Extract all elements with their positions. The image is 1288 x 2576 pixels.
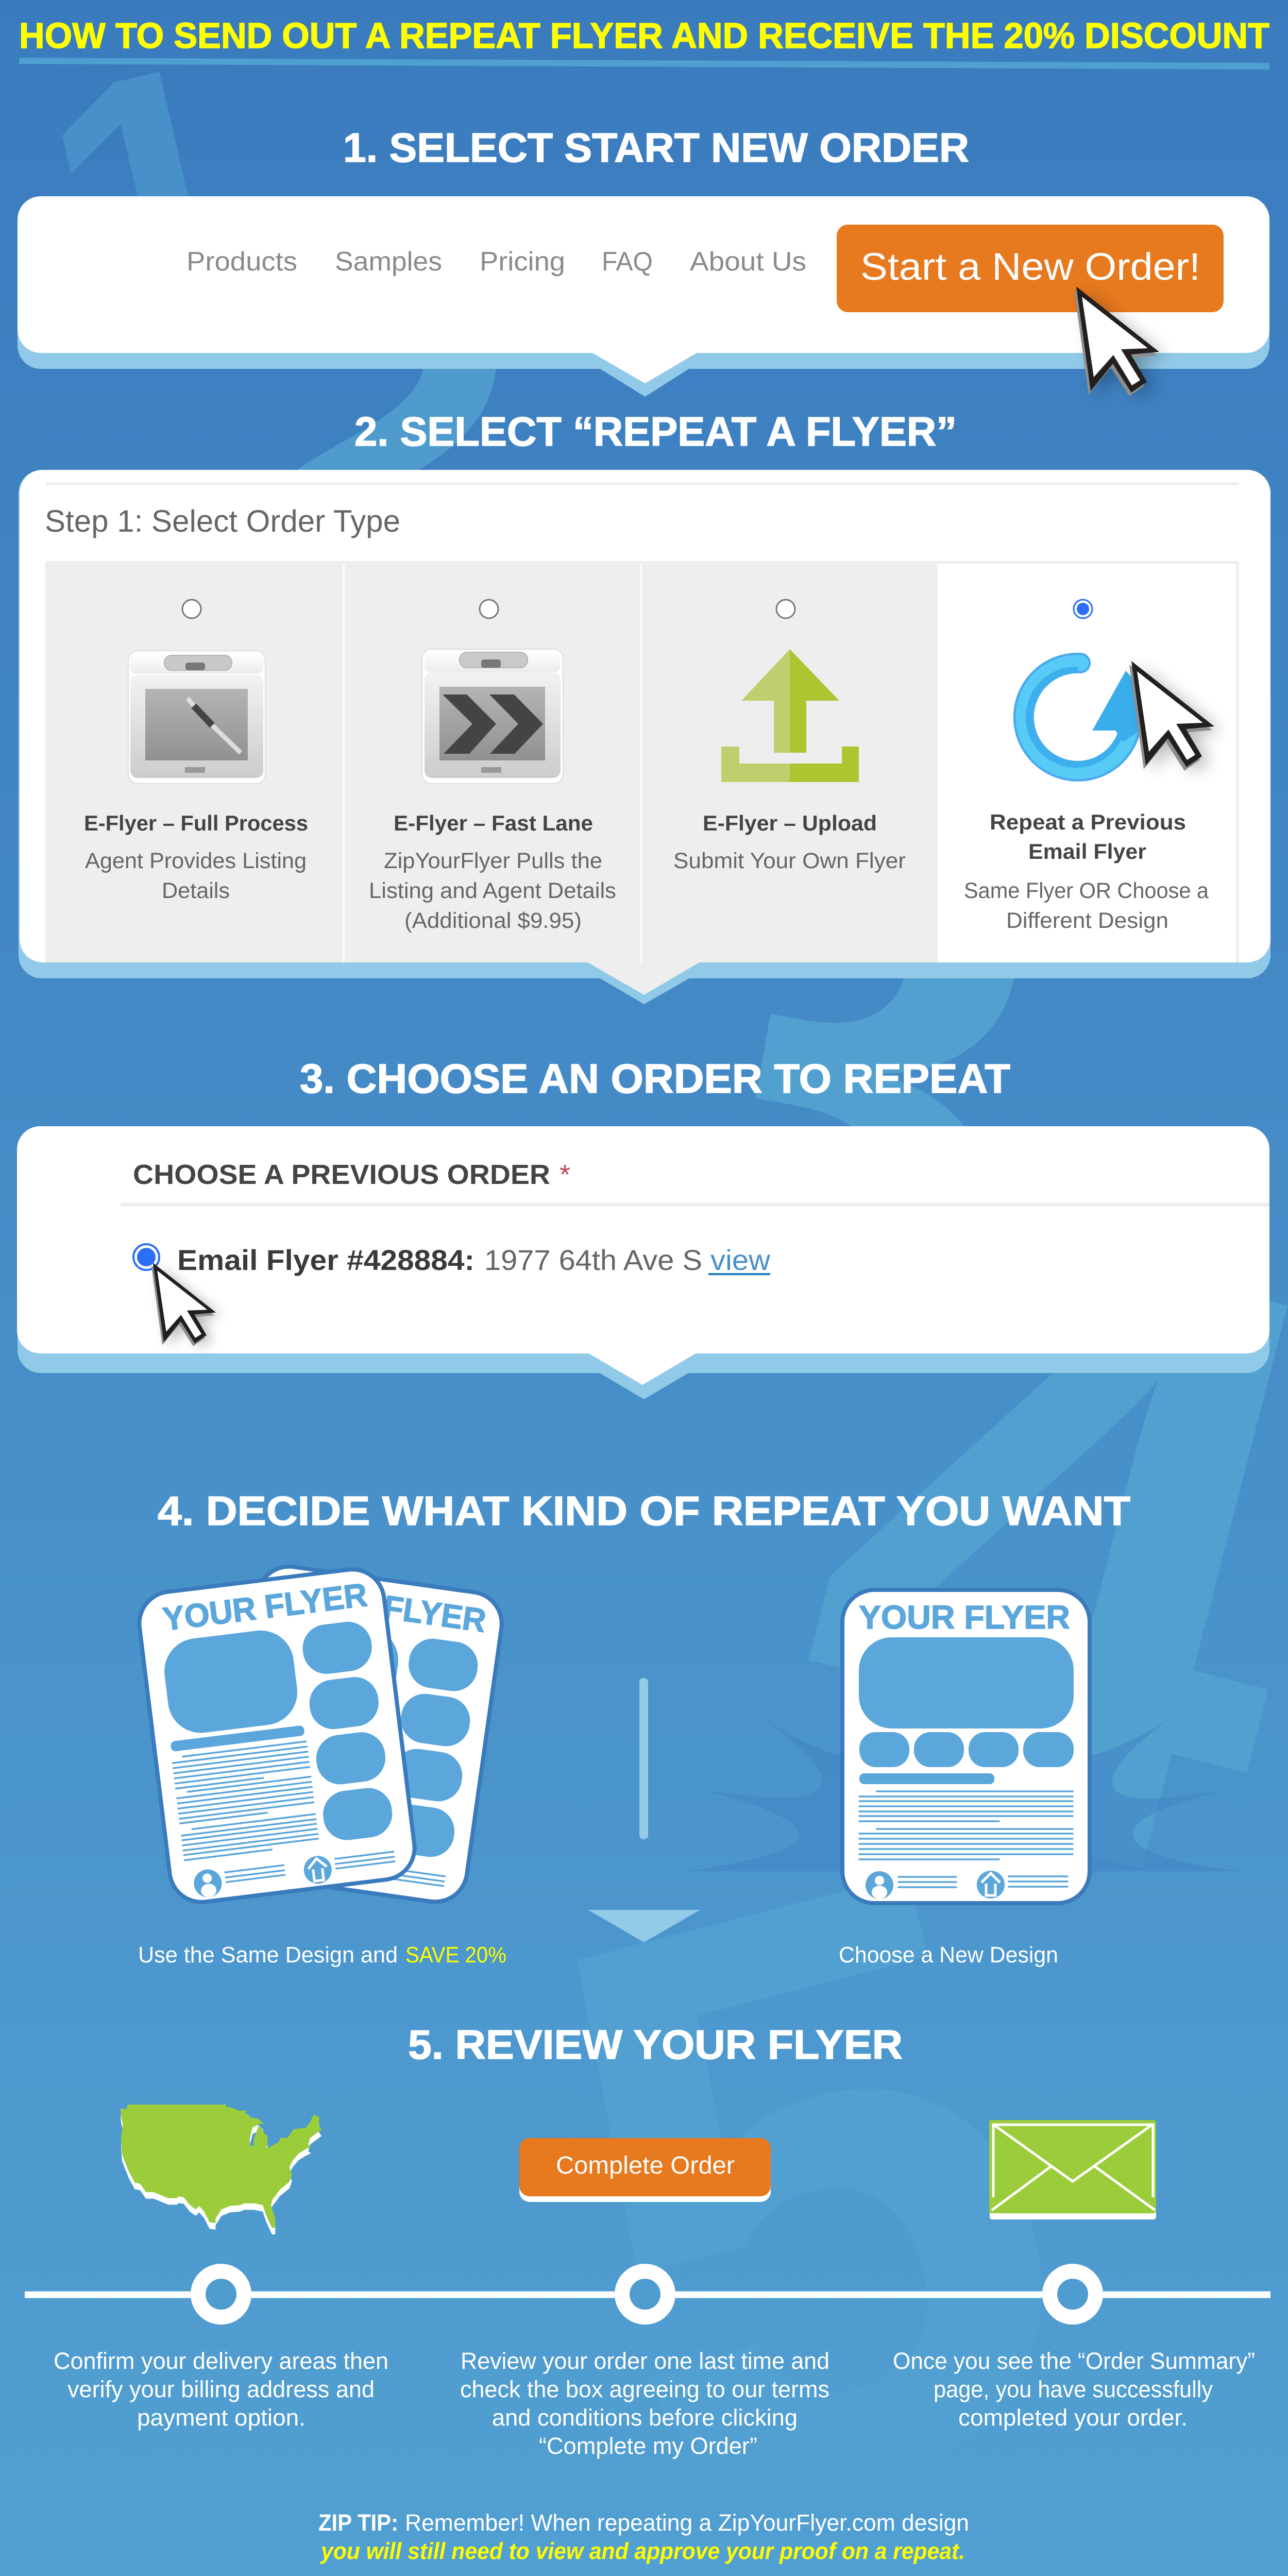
option: fast lane: Listing and Agent Details [369,878,616,903]
text: review order: “Complete my Order” [539,2433,757,2459]
text: order summary: page, you have successfully [934,2376,1213,2402]
option: fast lane: (Additional $9.95) [404,908,582,933]
house icon [977,1871,1005,1899]
option: upload: E-Flyer – Upload [703,811,877,835]
heading: step 4: 4. DECIDE WHAT KIND OF REPEAT YOU WANT [158,1488,1130,1534]
main image block [859,1637,1074,1728]
text: order summary [893,2348,1255,2431]
option: full process: E-Flyer – Full Process [84,811,308,835]
selected radio [133,1244,159,1270]
zip tip [318,2510,969,2564]
option: repeat previous (selected): Different Design [1006,908,1168,933]
house icon [302,1854,333,1885]
text: review order: and conditions before clicking [492,2404,798,2431]
button: start a new order: Start a New Order! [860,245,1200,288]
text: review order [460,2348,829,2459]
icon: US map [121,2104,321,2235]
option: full process: Details [162,878,230,903]
heading: step 1: 1. SELECT START NEW ORDER [343,125,969,171]
icon: tablet with chevrons [422,649,563,784]
option: fast lane [369,600,616,933]
navigation links: Products [187,247,297,277]
agent avatar [866,1871,893,1899]
arrow: down to step 5 [588,1910,700,1942]
order line [177,1244,771,1276]
flyer: same design, back copy [218,1563,506,1906]
panel: step 1 website nav [18,196,1269,397]
zip tip: Remember! When repeating a ZipYourFlyer.com design [405,2510,969,2536]
zip tip: ZIP TIP: [318,2510,398,2536]
text: confirm delivery [54,2348,388,2431]
icon: envelope [989,2120,1156,2219]
text: order summary: Once you see the “Order Summary” [893,2348,1255,2374]
required marker: * [560,1159,570,1190]
icon: cursor on order [151,1263,222,1347]
text: review order: check the box agreeing to our terms [460,2376,829,2402]
navigation links [187,247,806,277]
ghost numeral 2: 2 [174,128,556,744]
icon: upload arrow [721,649,859,782]
flyer: new design [842,1590,1090,1903]
text: order summary: completed your order. [958,2404,1188,2431]
order line: 1977 64th Ave S [484,1244,702,1276]
flyer title: YOUR FLYER [161,1576,369,1638]
option grid background [45,561,1239,962]
icon: cursor on repeat option [1129,661,1222,772]
panel: step 3 previous order [17,1126,1269,1399]
starburst behind new design flyer [689,1716,1244,1871]
order line: view [710,1244,771,1276]
text: confirm delivery: Confirm your delivery areas then [54,2348,388,2374]
field label: CHOOSE A PREVIOUS ORDER [133,1159,550,1190]
text: confirm delivery: verify your billing address and [67,2376,375,2402]
button: start a new order [837,225,1224,312]
icon: repeat arrow [1024,663,1140,771]
navigation links: Pricing [480,247,565,277]
option: repeat previous (selected) [938,564,1236,962]
side photos [300,1619,395,1843]
option: repeat previous (selected): Repeat a Previous [990,810,1186,834]
subheading: select order type: Step 1: Select Order Type [45,504,400,538]
heading: step 3: 3. CHOOSE AN ORDER TO REPEAT [300,1056,1010,1101]
divider between repeat options [639,1678,648,1839]
button: complete order: Complete Order [556,2152,735,2179]
option: fast lane: E-Flyer – Fast Lane [394,811,593,835]
text: review order: Review your order one last time and [461,2348,829,2374]
caption: new design: Choose a New Design [839,1942,1058,1968]
option: upload: Submit Your Own Flyer [673,849,906,873]
heading: step 2: 2. SELECT “REPEAT A FLYER” [354,409,957,454]
caption: same design: SAVE 20% [405,1942,506,1968]
caption: same design: Use the Same Design and [138,1942,398,1968]
option: repeat previous (selected): Same Flyer OR Choose a [964,878,1209,903]
option: upload [673,600,906,873]
title underline [19,58,1269,70]
title: HOW TO SEND OUT A REPEAT FLYER AND RECEIVE THE 20% DISCOUNT [19,15,1269,56]
heading: step 5: 5. REVIEW YOUR FLYER [408,2022,903,2067]
flyer: same design, back copy: YOUR FLYER [280,1574,488,1639]
option: full process [84,600,308,903]
button: complete order [519,2138,771,2202]
main image block [161,1626,301,1737]
agent avatar [192,1868,224,1899]
timeline [25,2271,1270,2317]
option: full process: Agent Provides Listing [85,849,307,873]
order line: Email Flyer #428884: [177,1244,474,1276]
flyer: same design, front copy [135,1566,418,1906]
navigation links: About Us [690,247,806,277]
navigation links: Samples [335,247,442,277]
option: fast lane: ZipYourFlyer Pulls the [384,849,602,873]
text: confirm delivery: payment option. [137,2404,306,2431]
photo row [859,1732,1074,1767]
icon: cursor on button [1074,286,1166,398]
zip tip: you will still need to view and approve your proof on a repeat. [320,2538,965,2564]
icon: tablet with pen [128,651,265,784]
top rule [45,482,1239,485]
panel: step 2 order type [19,470,1270,1004]
option: repeat previous (selected): Email Flyer [1028,839,1146,863]
flyer title: YOUR FLYER [859,1599,1070,1636]
navigation links: FAQ [602,247,653,277]
ghost numeral 3: 3 [536,606,1109,1531]
